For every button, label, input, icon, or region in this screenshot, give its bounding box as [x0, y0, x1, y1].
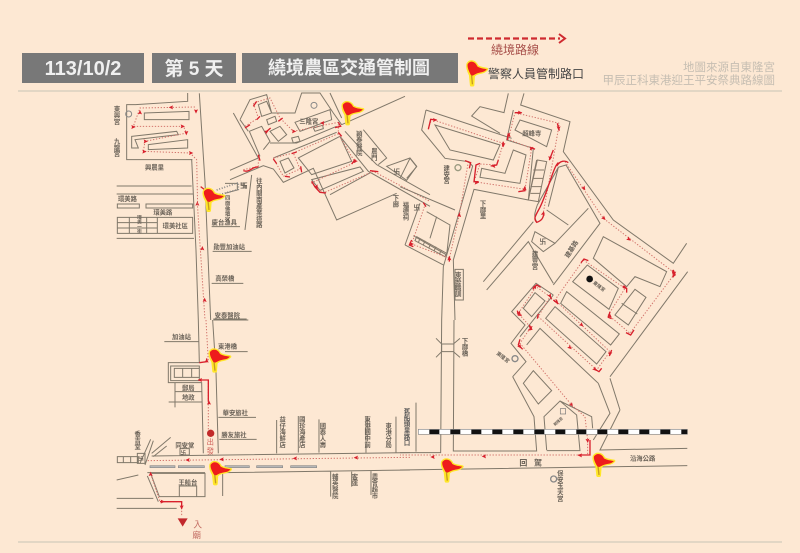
map: southeast area: 沿海公路 [630, 453, 656, 462]
flag: Sanlong temple junction [343, 102, 363, 124]
legend: route arrow [468, 34, 565, 57]
map: southeast blocks: 東隆宮 [495, 350, 511, 365]
map: southwest area: 東港分局 [384, 421, 391, 449]
end arrow: into temple [178, 518, 202, 540]
map: southwest area: 加油站 [172, 332, 192, 341]
map: southeast area: 保安玉天宮 [556, 469, 563, 503]
map: southwest area: 國泰人壽 [318, 422, 326, 449]
map: north center streets: 穎泰醫院 [355, 129, 362, 157]
map: northeast area: 建安宮 [442, 164, 449, 185]
map: north center streets [224, 93, 430, 229]
map: southeast blocks: 東隆宮 [591, 279, 607, 294]
map: southwest area: 卐 [138, 455, 144, 463]
map: southeast area: 舊船頭里路口 [402, 407, 410, 446]
map: southwest area: 卐 [181, 449, 186, 457]
map: northwest area: 環美一街 [137, 214, 142, 235]
map: northwest area: 高榮橋 [215, 273, 235, 282]
source note: 甲辰正科東港迎王平安祭典路線圖 [602, 73, 775, 87]
map: west block: 九龍宮 [112, 137, 120, 158]
map: southwest area: 東港橋 [218, 341, 238, 350]
source note: 地圖來源自東隆宮 [683, 60, 775, 74]
map: southwest area: 東港國中前 [363, 415, 370, 449]
map: north center streets: 卐 [240, 182, 247, 190]
date box: 113/10/2 [45, 58, 121, 80]
title box [242, 53, 458, 83]
map: northwest area: 環美路 [118, 194, 138, 203]
map: southwest area: 香吉堂 [133, 429, 140, 450]
map: north center streets: 農門 [370, 147, 377, 162]
legend: police flag [467, 62, 584, 85]
map: southwest area: 郵局 [182, 383, 195, 392]
flag: coastal road [594, 454, 614, 476]
flag: Donggang bridge [210, 350, 230, 371]
map: southeast area: 回駕 [519, 457, 549, 467]
map: north center streets: 往內關南產業道路 [255, 176, 262, 229]
map: southwest area: 華安旅社 [223, 408, 249, 417]
start marker: 出 [207, 437, 214, 446]
map: northeast area: 卐 [539, 238, 546, 246]
map: west block [112, 93, 199, 206]
legend: route arrow: 繞境路線 [491, 42, 539, 57]
flag: return road center [442, 460, 462, 481]
map: northwest area: 環美社區 [163, 221, 189, 230]
flag: west junction [204, 189, 224, 211]
title box: 繞境農區交通管制圖 [268, 57, 430, 78]
map: north center streets: 三隆宮 [299, 117, 318, 126]
map: north center streets: 卐 [393, 168, 400, 176]
map: southwest area: 農會超市 [370, 472, 378, 500]
map: southwest area: 益仔海鮮店 [278, 415, 285, 449]
map: northwest area: 安泰醫院 [215, 310, 241, 319]
map: north center streets: 下廍 [391, 194, 399, 209]
bottom divider [18, 541, 782, 543]
day box: 第 5 天 [164, 57, 224, 80]
map: northeast area: 東藝職訓 [454, 270, 461, 298]
railway [418, 429, 687, 434]
map: northwest area [117, 93, 252, 320]
day box [152, 53, 236, 83]
map: west block: 東興宮 [112, 104, 120, 126]
map: north center streets: 福德祠 [401, 200, 409, 221]
map: north center streets: 四面佛壇宮 [224, 195, 230, 223]
map: west block: 興農里 [145, 162, 165, 171]
map: northeast area: 卐 [413, 204, 420, 212]
start marker [207, 430, 215, 456]
map: southwest area: 勝友旅社 [221, 430, 247, 439]
map: southeast area [400, 320, 687, 503]
date box [22, 53, 144, 83]
legend: police flag: 警察人員管制路口 [488, 66, 584, 81]
end arrow: into temple: 廟 [192, 529, 201, 540]
map: southwest area: 客運 [350, 472, 358, 487]
flag: main road start [210, 462, 231, 484]
map: northwest area: 勛豐加油站 [213, 242, 246, 251]
map: northeast area: 建豐宮 [530, 249, 538, 271]
end arrow: into temple: 入 [193, 519, 202, 529]
map: northeast area: 超峰寺 [522, 128, 542, 137]
map: northeast area [400, 93, 687, 320]
map: northeast area: 建基路 [562, 238, 580, 259]
map: southeast blocks [495, 259, 688, 408]
map: southwest area [117, 320, 410, 540]
top divider [18, 90, 782, 92]
map: southwest area: 國珍海產店 [298, 416, 305, 449]
map: northwest area: 慶台漁具 [212, 218, 238, 227]
map: northwest area: 環美路 [153, 208, 173, 217]
map: southwest area: 同安堂 [175, 440, 194, 449]
source note [602, 60, 775, 87]
map: northeast area: 下廍里 [478, 200, 486, 219]
map: southwest area: 地政 [182, 392, 195, 401]
map: northwest area: 卐 [241, 182, 248, 190]
start marker: 發 [207, 447, 215, 456]
map: southwest area: 王船台 [178, 477, 197, 486]
map: southeast area: 朝隆宮 [552, 415, 564, 427]
map: southwest area: 輔英醫院 [331, 472, 338, 500]
map: southeast area: 下廍橋 [460, 337, 468, 358]
